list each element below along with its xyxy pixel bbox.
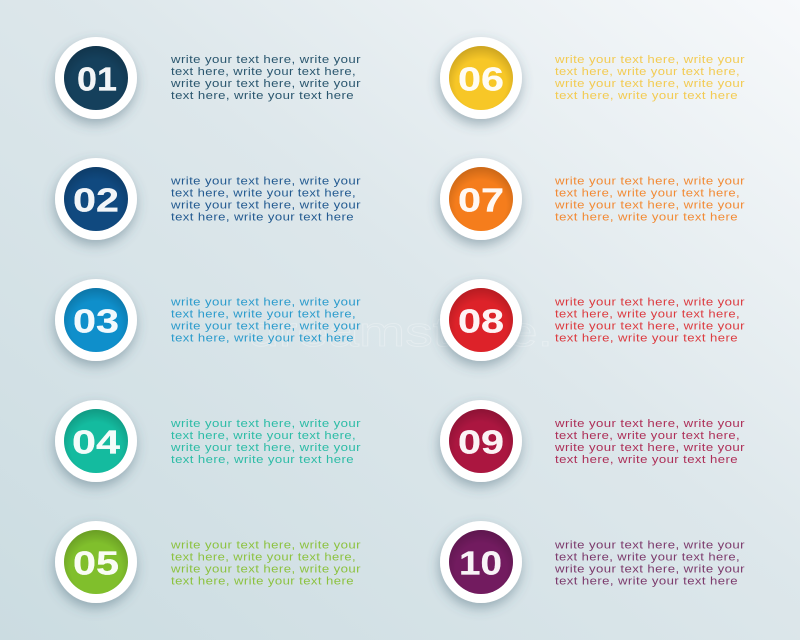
text block 08: text here, write your text here, (555, 308, 740, 320)
text block 06: text here, write your text here (555, 90, 738, 102)
text block 03: text here, write your text here, (171, 308, 356, 320)
badge 04: 04 (72, 424, 120, 462)
text block 02: write your text here, write your (170, 176, 361, 188)
text block 06 (554, 54, 745, 102)
badge 04 (55, 400, 137, 482)
text block 04: write your text here, write your (170, 418, 361, 430)
badge 09 (440, 400, 522, 482)
text block 10: write your text here, write your (554, 540, 745, 552)
text block 06: text here, write your text here, (555, 66, 740, 78)
item 02 (55, 158, 361, 240)
badge 09: 09 (458, 424, 504, 462)
item 08 (440, 279, 745, 361)
badge 10: 10 (459, 546, 502, 582)
badge 01 (55, 37, 137, 119)
item 07 (440, 158, 745, 240)
badge 06: 06 (458, 62, 504, 98)
text block 05: write your text here, write your (170, 540, 361, 552)
text block 05: write your text here, write your (170, 564, 361, 576)
text block 10: text here, write your text here, (555, 552, 740, 564)
text block 02 (170, 176, 361, 224)
badge 03 (55, 279, 137, 361)
item 04 (55, 400, 361, 482)
text block 07: text here, write your text here, (555, 188, 740, 200)
item 05 (55, 521, 361, 603)
text block 05 (170, 540, 361, 588)
text block 09: text here, write your text here (555, 454, 738, 466)
text block 01: text here, write your text here (171, 90, 354, 102)
text block 07: write your text here, write your (554, 200, 745, 212)
badge 03: 03 (73, 304, 119, 340)
text block 02: text here, write your text here, (171, 188, 356, 200)
text block 02: text here, write your text here (171, 212, 354, 224)
text block 09: write your text here, write your (554, 442, 745, 454)
badge 07: 07 (458, 182, 504, 220)
text block 04: write your text here, write your (170, 442, 361, 454)
text block 03: write your text here, write your (170, 320, 361, 332)
badge 07 (440, 158, 522, 240)
watermark: dreamstime. (248, 308, 553, 355)
badge 02 (55, 158, 137, 240)
text block 02: write your text here, write your (170, 200, 361, 212)
text block 03: write your text here, write your (170, 296, 361, 308)
text block 01: write your text here, write your (170, 78, 361, 90)
text block 09: write your text here, write your (554, 418, 745, 430)
text block 08: text here, write your text here (555, 332, 738, 344)
text block 09 (554, 418, 745, 466)
badge 02: 02 (73, 182, 119, 220)
badge 10 (440, 521, 522, 603)
text block 03: text here, write your text here (171, 332, 354, 344)
badge 08: 08 (458, 304, 504, 340)
text block 03 (170, 296, 361, 344)
item 10 (440, 521, 745, 603)
text block 06: write your text here, write your (554, 78, 745, 90)
text block 04 (170, 418, 361, 466)
text block 05: text here, write your text here, (171, 552, 356, 564)
item 09 (440, 400, 745, 482)
badge 01: 01 (77, 62, 117, 98)
item 06 (440, 37, 745, 119)
text block 04: text here, write your text here (171, 454, 354, 466)
text block 08: write your text here, write your (554, 320, 745, 332)
text block 08: write your text here, write your (554, 296, 745, 308)
item 03 (55, 279, 361, 361)
text block 01: write your text here, write your (170, 54, 361, 66)
text block 08 (554, 296, 745, 344)
text block 06: write your text here, write your (554, 54, 745, 66)
text block 04: text here, write your text here, (171, 430, 356, 442)
badge 08 (440, 279, 522, 361)
text block 01 (170, 54, 361, 102)
text block 10 (554, 540, 745, 588)
badge 05: 05 (73, 546, 119, 582)
text block 10: write your text here, write your (554, 564, 745, 576)
text block 09: text here, write your text here, (555, 430, 740, 442)
badge 05 (55, 521, 137, 603)
badge 06 (440, 37, 522, 119)
text block 07: text here, write your text here (555, 212, 738, 224)
item 01 (55, 37, 361, 119)
text block 07 (554, 176, 745, 224)
text block 07: write your text here, write your (554, 176, 745, 188)
text block 05: text here, write your text here (171, 576, 354, 588)
text block 01: text here, write your text here, (171, 66, 356, 78)
text block 10: text here, write your text here (555, 576, 738, 588)
